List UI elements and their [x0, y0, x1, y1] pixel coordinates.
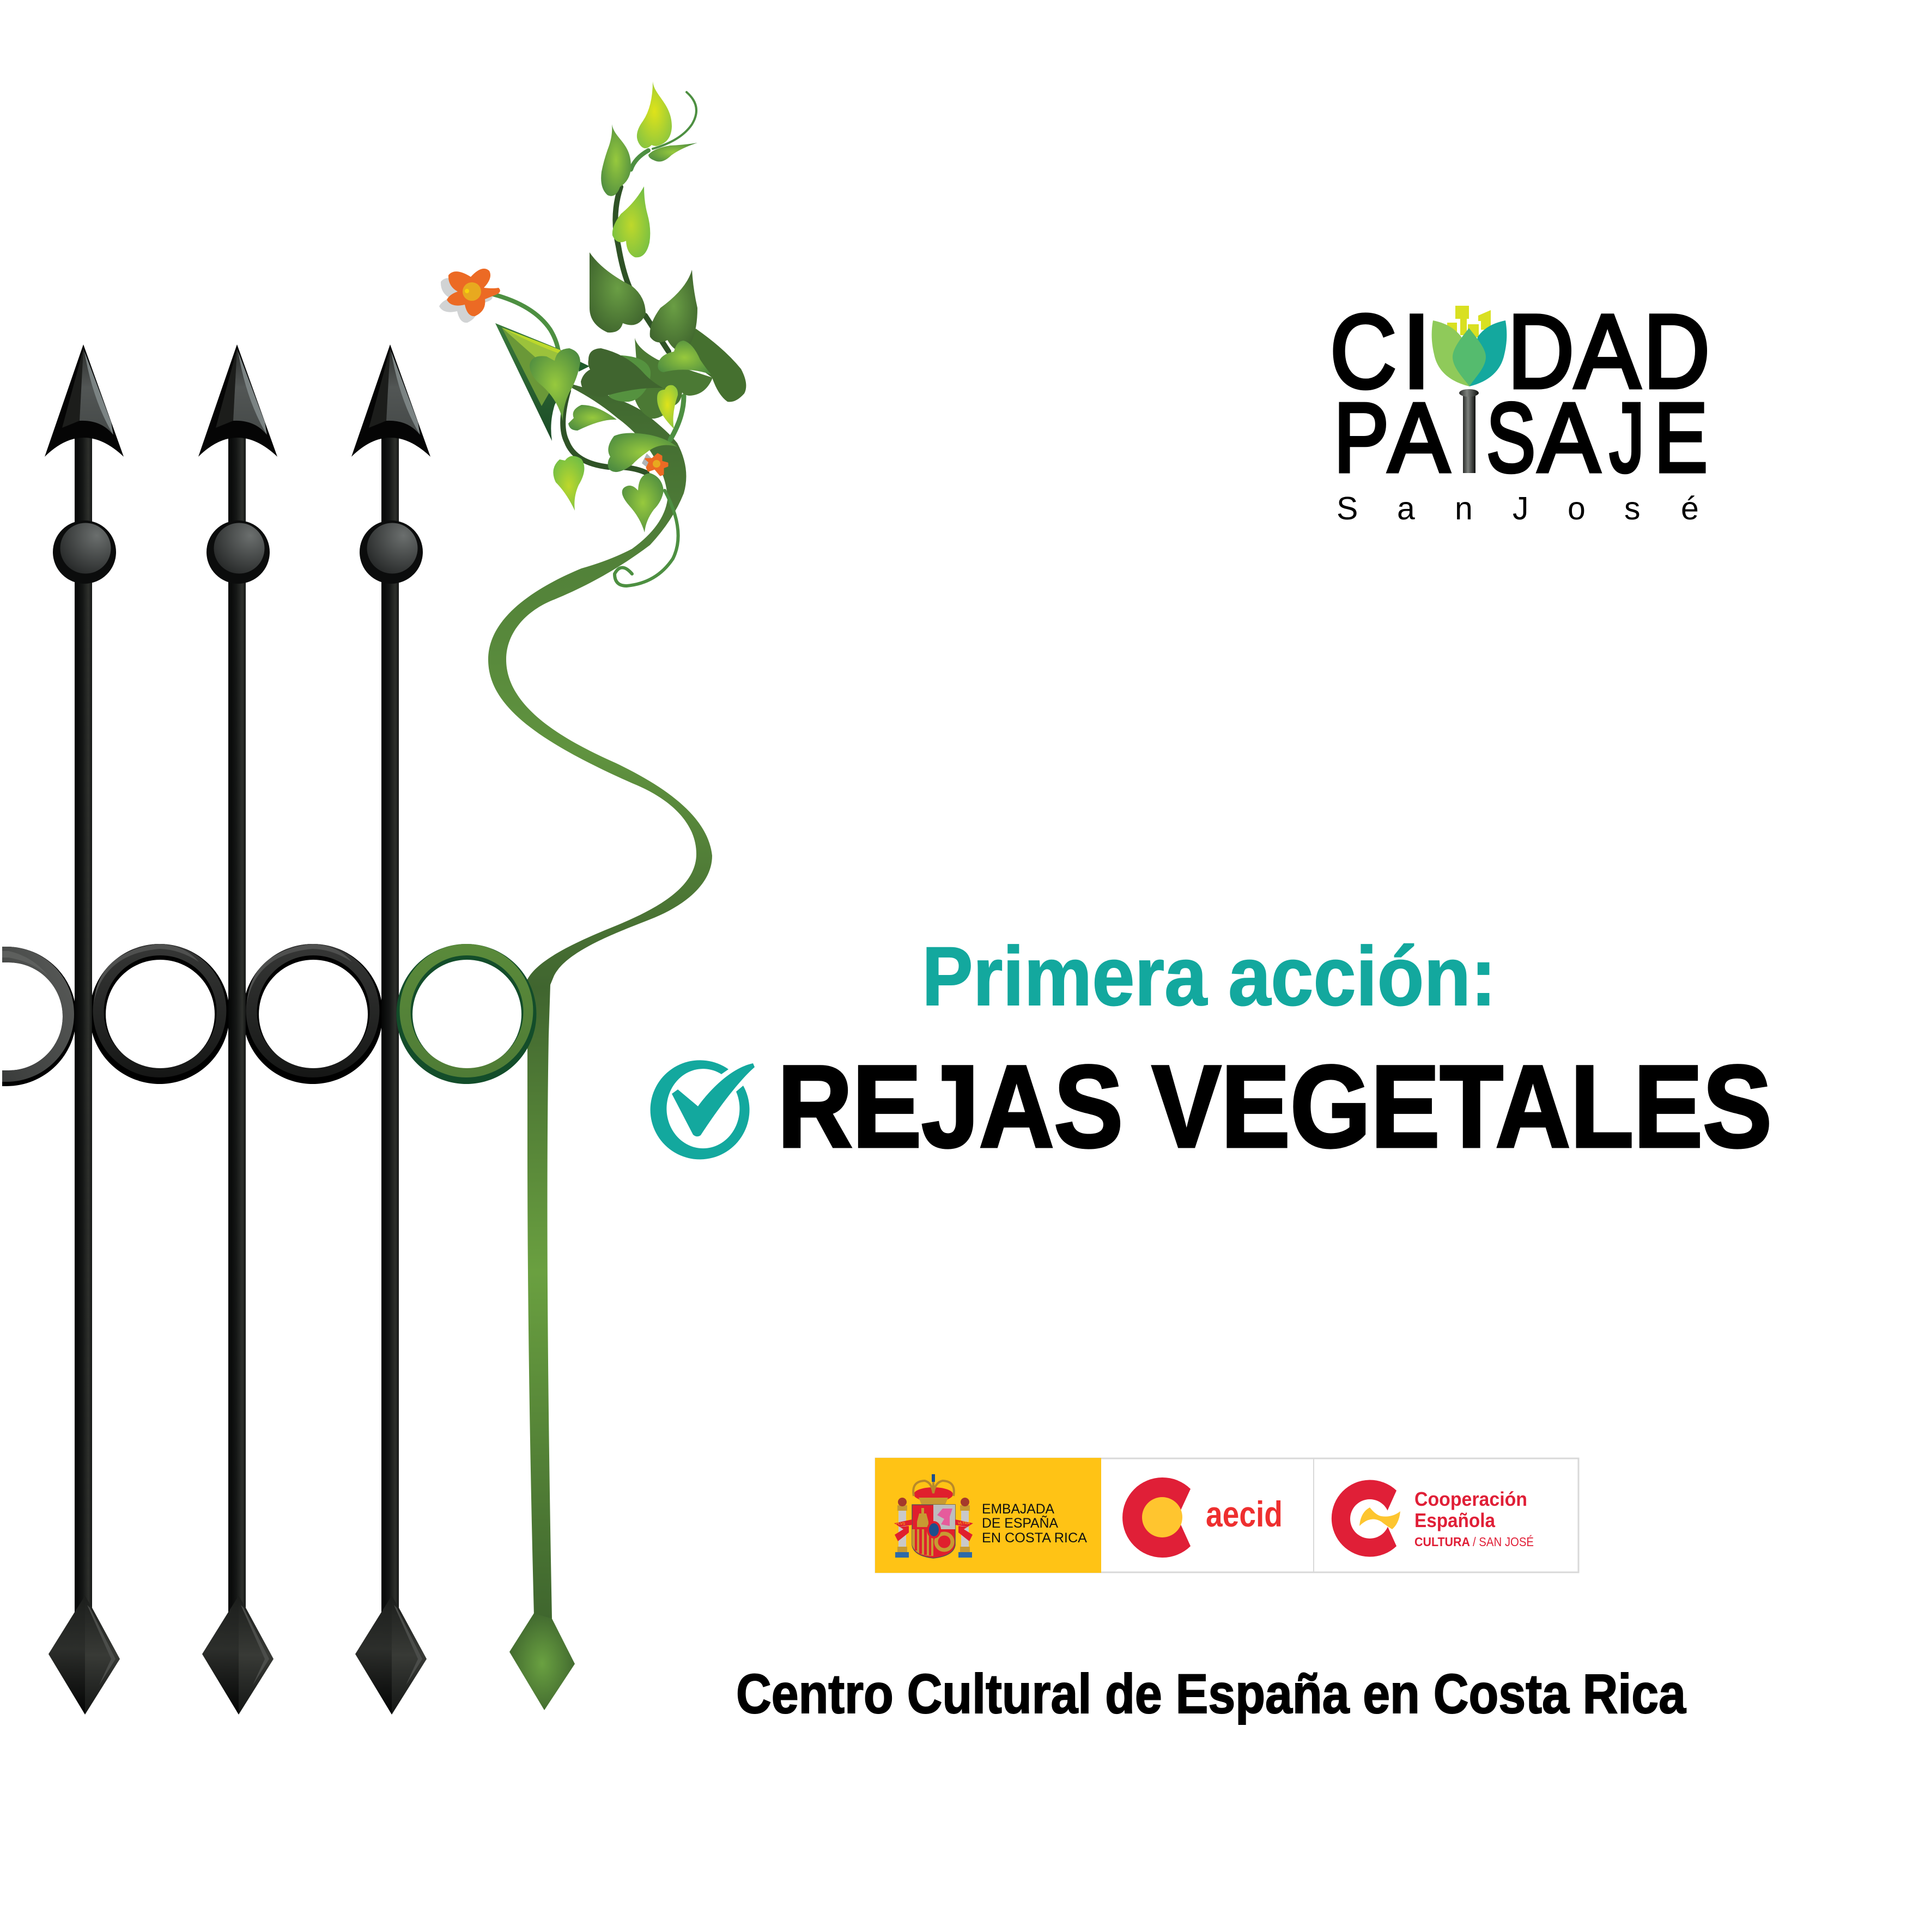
embassy text: EMBAJADA — [982, 1501, 1054, 1517]
banners — [894, 1519, 912, 1541]
Cooperación Española panel: / SAN JOSÉ — [1473, 1535, 1534, 1549]
logo subtitle San José: S — [1337, 490, 1358, 526]
ring: black ring 3 — [242, 944, 382, 1084]
arrow head — [351, 344, 430, 457]
pillars — [898, 1511, 969, 1547]
logo subtitle San José: s — [1624, 490, 1640, 526]
bar 1 — [45, 344, 124, 1715]
bottom spear — [202, 1596, 274, 1715]
logo wordmark line 2: S — [1486, 383, 1535, 493]
logo wordmark line 2: A — [1388, 383, 1449, 493]
bottom spear — [48, 1596, 120, 1715]
crown — [914, 1487, 953, 1501]
shield — [912, 1505, 955, 1558]
Cooperación Española panel — [1332, 1480, 1534, 1557]
logo wordmark line 1: D — [1643, 293, 1710, 410]
embassy text: DE ESPAÑA — [982, 1515, 1058, 1531]
ring: green ring — [396, 944, 536, 1084]
icon: coat of arms of Spain: PLVS — [896, 1522, 906, 1526]
footer: Centro Cultural de España en Costa Rica: Centro Cultural de España en Costa Rica — [736, 1663, 1686, 1725]
vine stem with bottom spear — [488, 384, 712, 1710]
logo wordmark line 2: J — [1610, 383, 1644, 493]
logo subtitle San José: J — [1513, 490, 1529, 526]
tendrils and thin stems — [493, 92, 696, 586]
arrow-shaped leaf — [495, 323, 579, 441]
Cooperación Española panel: Española — [1414, 1509, 1496, 1531]
logo wordmark line 2: P — [1334, 383, 1389, 493]
ring: cropped left ring — [2, 947, 76, 1086]
logo nail — [1459, 389, 1479, 473]
embassy text: EN COSTA RICA — [982, 1530, 1087, 1546]
logo subtitle San José: a — [1397, 490, 1415, 526]
logo subtitle San José: o — [1568, 490, 1586, 526]
icon: coat of arms of Spain — [894, 1474, 973, 1558]
heading: Primera acción: Primera acción: — [922, 930, 1496, 1023]
fence: iron bars and rings — [2, 344, 430, 1715]
logo subtitle San José: é — [1681, 490, 1699, 526]
strip frame — [876, 1458, 1578, 1572]
aecid panel — [1122, 1477, 1283, 1558]
arrow head — [198, 344, 277, 457]
ball — [207, 520, 270, 584]
icon: teal check mark — [651, 1060, 755, 1159]
climbing vine — [396, 81, 746, 1710]
embassy text — [982, 1501, 1087, 1546]
arrow head — [45, 344, 124, 457]
logo wordmark line 2 — [1334, 383, 1708, 493]
embassy panel — [875, 1458, 1101, 1573]
logo wordmark line 1: I — [1402, 293, 1431, 410]
logo wordmark line 2: E — [1654, 383, 1708, 493]
logo wordmark line 1 — [1330, 293, 1710, 410]
logo wordmark line 2: A — [1538, 383, 1600, 493]
logo subtitle San José: n — [1455, 490, 1473, 526]
title: REJAS VEGETALES: REJAS VEGETALES — [778, 1041, 1772, 1172]
ring: black ring 2 — [89, 944, 229, 1084]
Cooperación Española panel: CULTURA — [1414, 1535, 1470, 1549]
logo wordmark line 1: C — [1330, 293, 1396, 410]
icon: small orange flower — [642, 453, 667, 475]
bar 3 — [351, 344, 430, 1715]
light leaves — [530, 81, 711, 532]
ball — [360, 520, 423, 584]
bottom spear — [355, 1596, 427, 1715]
logo wordmark line 1: D — [1508, 293, 1574, 410]
panel divider — [1313, 1458, 1314, 1572]
logo subtitle San José — [1337, 490, 1699, 526]
aecid panel: aecid — [1206, 1494, 1283, 1534]
dark leaves cluster — [579, 252, 746, 419]
icon: large orange flower — [439, 269, 500, 323]
sponsor logos strip — [875, 1458, 1578, 1573]
bar 2 — [198, 344, 277, 1715]
logo tulip icon — [1432, 306, 1507, 386]
Cooperación Española panel: Cooperación — [1414, 1488, 1527, 1510]
ball — [53, 520, 116, 584]
icon: coat of arms of Spain: VLTRA — [958, 1522, 970, 1525]
logo wordmark line 1: A — [1575, 293, 1640, 410]
logo: Ciudad Paisaje San José — [1330, 293, 1710, 526]
